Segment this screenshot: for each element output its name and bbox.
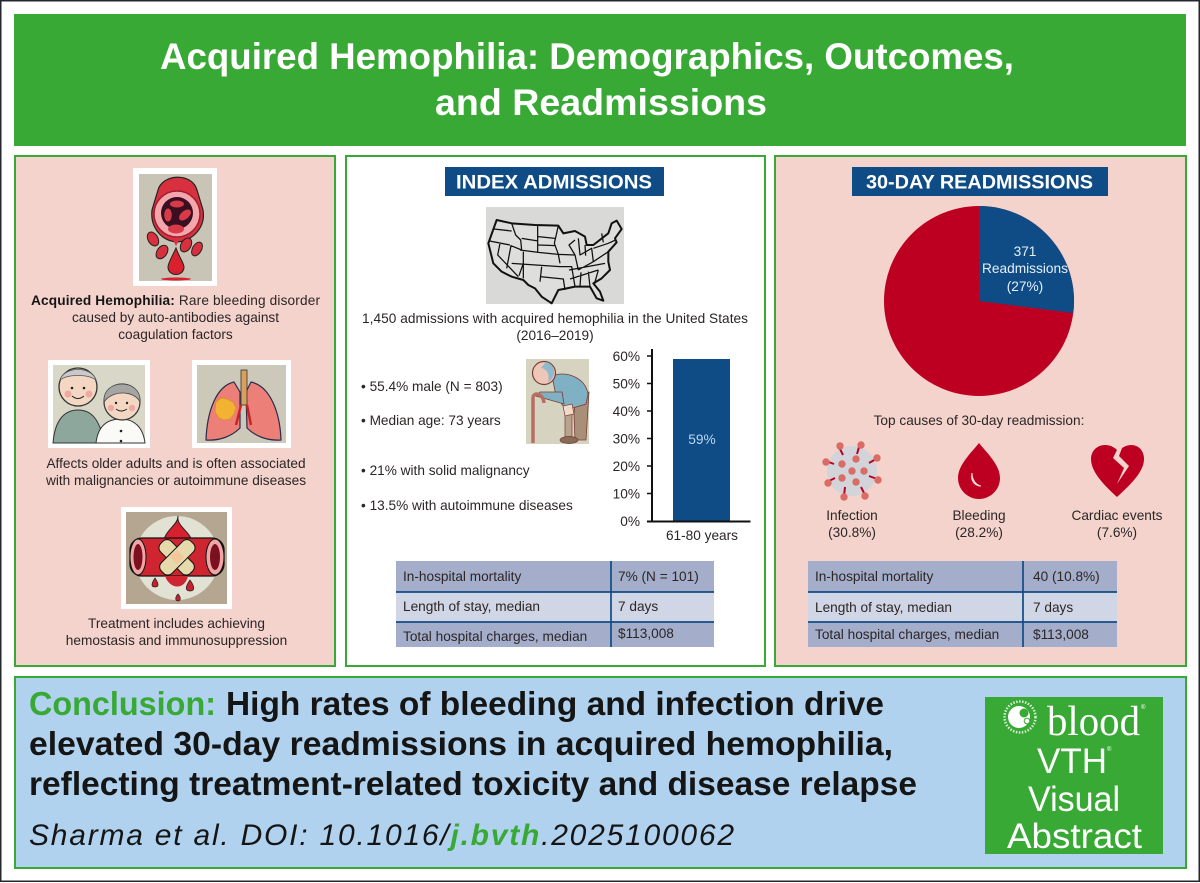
table: readmission outcomes: Length of stay, median [815,600,952,615]
logo: blood VTH visual abstract: VTH [1037,742,1107,781]
text: definition: coagulation factors [118,327,233,342]
table: index admission outcomes: Total hospital charges, median [403,629,587,644]
bar chart: age group: 20% [613,459,640,474]
text: admissions count [362,311,748,343]
icon: infection virus [822,441,882,501]
bar chart: age group: 10% [613,486,640,502]
text: treatment: Treatment includes achieving [88,616,265,631]
table: index admission outcomes [396,561,714,647]
text: top causes heading: Top causes of 30-day readmission: [874,413,1084,428]
list: demographics: • 13.5% with autoimmune diseases [361,498,573,513]
bar chart: age group: 61-80 years [666,528,738,543]
logo: blood VTH visual abstract: Visual [1028,780,1120,819]
logo: blood VTH visual abstract: ® [1107,746,1112,753]
label: infection: Infection [826,508,878,523]
bar chart: age group: 59% [688,432,716,447]
title banner: Acquired Hemophilia: Demographics, Outcomes, [160,36,1014,77]
list: demographics: • Median age: 73 years [361,413,501,428]
table: readmission outcomes: 40 (10.8%) [1033,569,1100,584]
table: index admission outcomes: 7 days [618,599,658,614]
list: demographics: • 21% with solid malignancy [361,463,530,478]
pie chart: readmissions share: (27%) [1007,279,1043,294]
text: citation: Sharma et al. DOI: 10.1016/j.bvth.2025100062 [29,819,734,852]
label: bleeding [952,508,1006,540]
panel: 30-day readmissions [775,156,1186,666]
panel: about acquired hemophilia [15,156,335,666]
text: who is affected: with malignancies or autoimmune diseases [45,473,306,488]
icon: broken heart [1091,445,1144,497]
text: definition: caused by auto-antibodies against [72,310,279,325]
label: cardiac events: (7.6%) [1097,525,1137,540]
title banner: and Readmissions [435,82,767,123]
logo: blood VTH visual abstract: Abstract [1007,817,1142,856]
bar chart: age group: 60% [613,349,640,364]
pie chart: readmissions share: 371 [1014,244,1036,259]
text: conclusion statement: High rates of bleeding and infection drive [226,686,884,723]
icon: US map [486,207,624,304]
bar chart: age group: 0% [620,514,640,529]
text: treatment: hemostasis and immunosuppression [66,633,287,648]
table: readmission outcomes: Total hospital charges, median [815,627,999,642]
table: index admission outcomes: 7% (N = 101) [618,569,699,584]
label: cardiac events: Cardiac events [1072,508,1163,523]
bar chart: age group: 40% [613,404,640,419]
text: admissions count: (2016–2019) [516,328,594,343]
label: infection [826,508,878,540]
heading: index admissions [445,167,664,196]
heading: index admissions: INDEX ADMISSIONS [456,172,652,194]
table: index admission outcomes: In-hospital mortality [403,569,521,584]
heading: 30-day readmissions [852,167,1108,196]
bar chart: age group: 30% [613,432,640,446]
bar chart: age group: 50% [613,376,640,392]
heading: 30-day readmissions: 30-DAY READMISSIONS [866,172,1093,194]
label: infection: (30.8%) [828,525,876,540]
logo: blood VTH visual abstract: ® [1141,704,1146,711]
text: who is affected: Affects older adults and is often associated [46,456,306,471]
table: readmission outcomes: In-hospital mortality [815,569,933,584]
pie chart: readmissions share [884,206,1074,396]
label: bleeding: (28.2%) [955,525,1003,540]
text: conclusion statement [29,686,917,803]
icon: older couple [48,360,150,448]
logo: blood VTH visual abstract: blood [1047,699,1140,745]
text: admissions count: 1,450 admissions with acquired hemophilia in the United States [362,311,748,326]
list: demographics [361,379,573,513]
bar chart: age group [613,349,750,543]
list: demographics: • 55.4% male (N = 803) [361,379,503,394]
text: definition: Acquired Hemophilia: Rare bleeding disorder [31,293,320,308]
panel: index admissions [346,156,765,666]
text: conclusion statement: Conclusion: [29,686,216,723]
table: index admission outcomes: $113,008 [618,626,674,641]
icon: elderly man with cane [526,359,589,444]
text: who is affected [45,456,306,488]
text: conclusion statement: elevated 30-day readmissions in acquired hemophilia, [29,726,893,763]
icon: blood drop [958,443,1000,499]
icon: lungs with tumor [192,360,291,448]
panel: conclusion [15,677,1186,868]
table: readmission outcomes: 7 days [1033,600,1073,615]
pie chart: readmissions share: Readmissions [982,261,1068,276]
icon: bandaged vessel [121,507,232,609]
text: definition [31,293,320,342]
logo: blood VTH visual abstract [985,697,1163,856]
title banner [14,14,1186,146]
table: readmission outcomes [808,561,1117,647]
text: conclusion statement: reflecting treatment-related toxicity and disease relapse [29,766,917,803]
icon: blood vessel with cells [133,168,217,286]
table: index admission outcomes: Length of stay, median [403,599,540,614]
label: cardiac events [1072,508,1163,540]
text: treatment [66,616,287,648]
table: readmission outcomes: $113,008 [1033,627,1089,642]
label: bleeding: Bleeding [952,508,1006,523]
